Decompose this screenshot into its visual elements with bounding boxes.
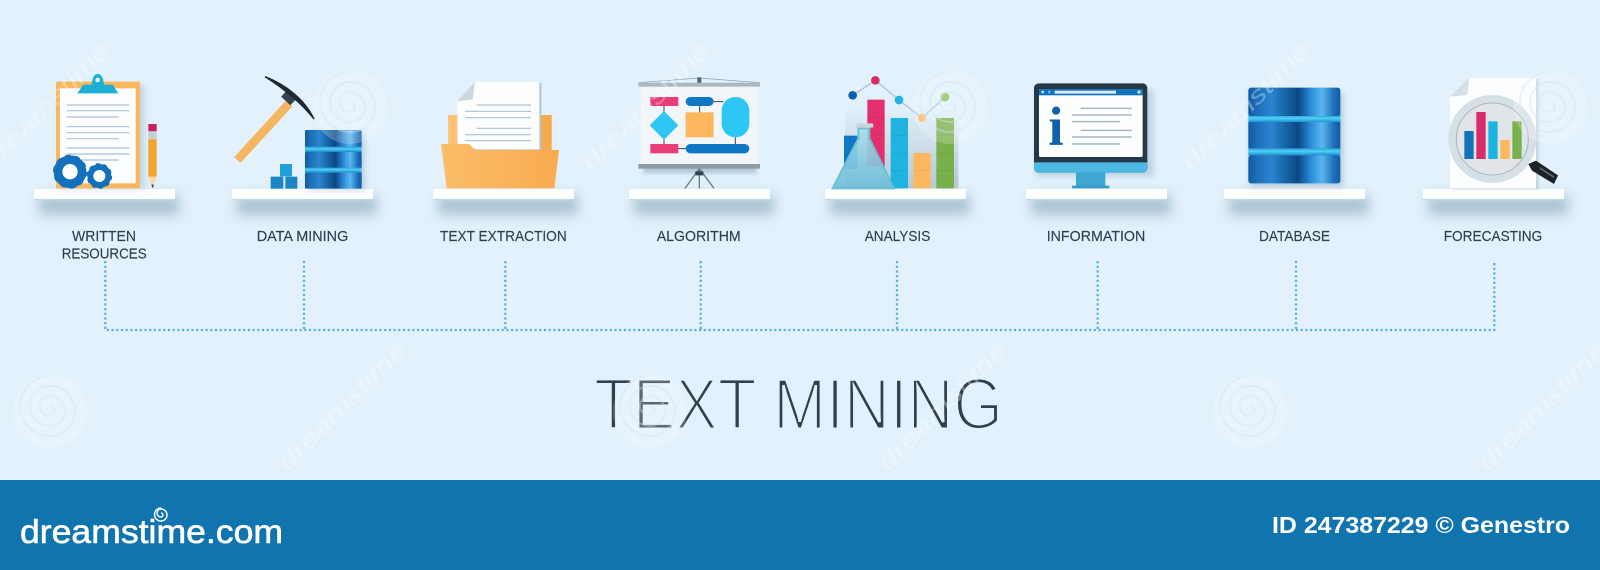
label: written resources: WRITTEN (72, 228, 136, 245)
watermark: dreamstime (1473, 337, 1600, 476)
watermark: dreamstime (577, 37, 716, 176)
icon: flowchart on projection screen (638, 77, 760, 188)
label: written resources: RESOURCES (62, 246, 147, 262)
footer logo text: dreamstime.com (20, 513, 283, 550)
watermark: dreamstime (1177, 37, 1316, 176)
icon: logo spiral (154, 508, 167, 521)
panel: information (1026, 83, 1171, 245)
panel: data mining (232, 77, 377, 245)
icon: bar chart and flask (833, 76, 958, 188)
icon: monitor with info page: i (1048, 96, 1064, 157)
watermark: dreamstime (873, 337, 1012, 476)
label: text extraction: TEXT EXTRACTION (440, 228, 567, 245)
panel: text extraction (433, 82, 578, 245)
panel: algorithm (629, 77, 774, 245)
icon: clipboard with gears and pencil (55, 74, 157, 189)
icon: document with magnifier chart (1450, 78, 1558, 189)
watermark (0, 37, 1600, 476)
panel: analysis (825, 76, 970, 245)
icon: pickaxe, cubes and database (237, 77, 365, 190)
title: TEXT MINING (594, 365, 1003, 445)
label: data mining: DATA MINING (257, 228, 348, 245)
label: algorithm: ALGORITHM (657, 228, 741, 245)
footer image id and author: ID 247387229 © Genestro (1272, 512, 1570, 538)
label: information: INFORMATION (1047, 228, 1145, 245)
icon: monitor with info page (1034, 83, 1153, 188)
icon: database cylinder (1248, 88, 1343, 187)
label: database: DATABASE (1259, 228, 1330, 245)
label: written resources (62, 228, 147, 262)
label: analysis: ANALYSIS (865, 228, 930, 245)
panel: database (1224, 88, 1369, 245)
dotted connector line (105, 261, 1494, 330)
footer bar (0, 480, 1600, 570)
panel: written resources (34, 74, 179, 262)
watermark: dreamstime (273, 337, 412, 476)
icon: folder with document (441, 82, 559, 188)
label: forecasting: FORECASTING (1444, 228, 1542, 245)
panel: forecasting (1423, 78, 1568, 245)
